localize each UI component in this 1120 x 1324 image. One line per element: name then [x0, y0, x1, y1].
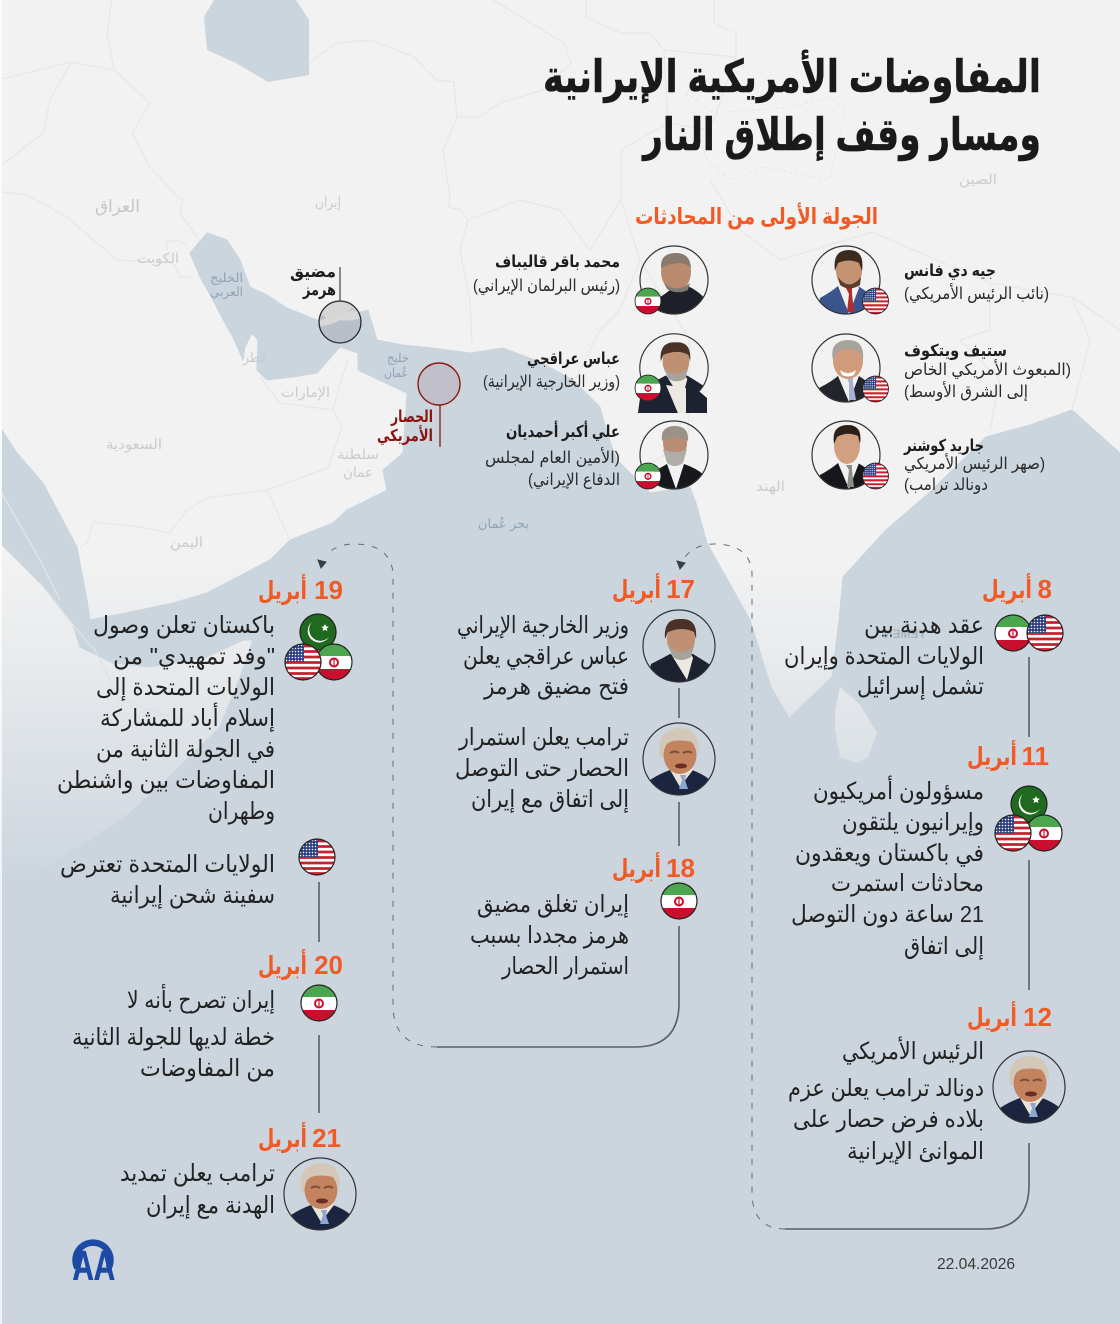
panel: april 19: في الجولة الثانية من — [96, 736, 275, 763]
panel: april 20: إيران تصرح بأنه لا — [127, 984, 275, 1015]
map labels: الهند — [756, 478, 785, 495]
panel: april 11: محادثات استمرت — [831, 870, 984, 897]
callout: american blockade — [377, 363, 460, 447]
panel: april 20 — [72, 949, 343, 1113]
panel: april 21: ترامب يعلن تمديد — [120, 1160, 275, 1187]
panel: april 17: وزير الخارجية الإيراني — [457, 612, 629, 639]
person: witkoff: إلى الشرق الأوسط) — [904, 381, 1028, 402]
date: 22.04.2026 — [937, 1256, 1015, 1273]
panel: april 19: إسلام أباد للمشاركة — [100, 703, 275, 733]
panel: april 19: باكستان تعلن وصول — [93, 612, 275, 639]
map: sri lanka — [835, 687, 877, 763]
portrait: trump — [284, 1158, 356, 1234]
panel: april 17: الحصار حتى التوصل — [455, 755, 629, 782]
panel: april 20: 20 — [314, 950, 343, 980]
panel: iran delegation — [473, 246, 708, 493]
portrait: trump — [993, 1051, 1065, 1127]
map labels: سلطنة — [337, 446, 379, 462]
map labels: الإمارات — [281, 384, 330, 401]
panel: april 12: الموانئ الإيرانية — [847, 1138, 984, 1165]
person: ahmadian: الدفاع الإيراني) — [528, 471, 620, 490]
title — [543, 49, 1041, 161]
map: bottom fade — [0, 560, 1120, 880]
panel: april 12: أبريل — [967, 1001, 1017, 1033]
heading: first round of talks: الجولة الأولى من المحادثات — [635, 202, 878, 230]
panel: april 11: 11 — [1022, 741, 1049, 771]
panel: april 11: إلى اتفاق — [904, 933, 984, 961]
callout: american blockade: الحصار — [390, 408, 433, 426]
panel: april 8: أبريل — [982, 573, 1032, 605]
panel: april 11: أبريل — [967, 740, 1017, 772]
callout: strait of hormuz: مضيق — [290, 263, 336, 282]
panel: april 11: في باكستان ويعقدون — [795, 840, 984, 867]
panel: april 19: "وفد تمهيدي" من — [113, 643, 275, 670]
panel: april 17: ترامب يعلن استمرار — [458, 724, 629, 751]
person: ahmadian — [485, 421, 708, 493]
icon: flag us — [299, 839, 335, 875]
portrait: araghchi — [643, 610, 715, 686]
person: kushner: (صهر الرئيس الأمريكي — [904, 453, 1045, 474]
timeline connector: middle column to left — [318, 544, 679, 1047]
person: ahmadian: علي أكبر أحمديان — [506, 421, 620, 442]
timeline connector: right column to middle — [677, 544, 1029, 1229]
panel: april 12: 12 — [1023, 1002, 1052, 1032]
panel: april 12: الرئيس الأمريكي — [842, 1036, 984, 1065]
person: vance — [812, 246, 1049, 318]
person: ghalibaf — [473, 246, 708, 318]
person: ghalibaf: محمد باقر قاليباف — [495, 253, 620, 272]
map labels: الصين — [959, 171, 997, 188]
panel: april 18: استمرار الحصار — [501, 953, 629, 980]
map labels: YEMEN — [884, 627, 926, 641]
person: ghalibaf: (رئيس البرلمان الإيراني) — [473, 277, 620, 296]
panel: april 19: سفينة شحن إيرانية — [110, 882, 275, 910]
panel: april 20: أبريل — [258, 949, 307, 981]
person: araghchi: (وزير الخارجية الإيرانية) — [483, 373, 620, 392]
map: borders — [0, 0, 1120, 720]
icon: flags pakistan us iran — [995, 786, 1062, 852]
person: vance: (نائب الرئيس الأمريكي) — [904, 283, 1049, 304]
panel: april 19 — [57, 574, 352, 942]
person: araghchi — [483, 334, 708, 413]
panel: april 19: الولايات المتحدة إلى — [96, 674, 275, 702]
person: witkoff: ستيف ويتكوف — [904, 342, 1007, 361]
map labels: العراق — [95, 197, 140, 216]
panel: april 11 — [791, 740, 1062, 990]
panel: april 19: الولايات المتحدة تعترض — [60, 851, 275, 878]
icon: flag iran — [301, 985, 337, 1022]
panel: april 21 — [120, 1122, 356, 1234]
panel: us delegation — [812, 246, 1071, 495]
map labels: العربي — [210, 285, 243, 300]
icon: flags pakistan us iran — [285, 614, 352, 681]
panel: april 19: 19 — [314, 575, 343, 605]
callout: strait of hormuz — [290, 263, 361, 343]
panel: april 17: فتح مضيق هرمز — [483, 673, 629, 700]
panel: april 8 — [784, 573, 1063, 737]
panel: april 11: 21 ساعة دون التوصل — [791, 901, 984, 928]
panel: april 8: تشمل إسرائيل — [857, 673, 984, 701]
person: kushner: دونالد ترامب) — [904, 476, 988, 495]
panel: april 20: خطة لديها للجولة الثانية — [72, 1024, 275, 1051]
panel: april 8: عقد هدنة بين — [864, 612, 984, 639]
panel: april 18: أبريل — [612, 852, 661, 884]
panel: april 18 — [470, 852, 697, 980]
panel: april 19: المفاوضات بين واشنطن — [57, 767, 275, 794]
map labels: الكويت — [137, 250, 179, 267]
icon: flag iran — [661, 883, 697, 920]
panel: april 8: 8 — [1038, 574, 1052, 604]
panel: april 21: 21 — [312, 1123, 341, 1153]
map labels: عُمان — [384, 366, 408, 380]
callout: strait of hormuz: هرمز — [302, 281, 336, 300]
panel: april 12: دونالد ترامب يعلن عزم — [788, 1075, 984, 1102]
panel: april 17: 17 — [666, 574, 695, 604]
person: vance: جيه دي فانس — [904, 262, 996, 281]
panel: april 18: هرمز مجددا بسبب — [470, 922, 629, 949]
panel: april 18: إيران تغلق مضيق — [477, 891, 629, 919]
map labels: الخليج — [210, 271, 243, 285]
person: kushner: جاريد كوشنر — [903, 437, 984, 456]
map labels: إيران — [315, 194, 341, 211]
map labels: السعودية — [106, 436, 162, 453]
panel: april 12 — [788, 1001, 1065, 1165]
person: ahmadian: (الأمين العام لمجلس — [485, 447, 620, 467]
panel: april 17: أبريل — [612, 573, 661, 605]
logo: AA: AA — [72, 1242, 115, 1289]
panel: april 21: أبريل — [258, 1122, 307, 1154]
panel: april 17 — [455, 573, 715, 846]
map labels: اليمن — [170, 534, 203, 551]
panel: april 17: إلى اتفاق مع إيران — [471, 786, 629, 814]
panel: april 12: بلاده فرض حصار على — [793, 1106, 984, 1133]
callout: american blockade: الأمريكي — [377, 425, 433, 446]
panel: april 8: الولايات المتحدة وإيران — [784, 643, 984, 671]
portrait: trump — [643, 723, 715, 799]
panel: april 17: عباس عراقجي يعلن — [463, 643, 629, 670]
panel: april 19: أبريل — [258, 574, 307, 606]
person: witkoff: (المبعوث الأمريكي الخاص — [904, 359, 1071, 380]
panel: april 18: 18 — [666, 853, 695, 883]
person: witkoff — [812, 334, 1071, 406]
panel: april 11: وإيرانيون يلتقون — [842, 809, 984, 837]
panel: april 11: مسؤولون أمريكيون — [813, 776, 984, 805]
person: araghchi: عباس عراقجي — [527, 350, 620, 369]
panel: april 21: الهدنة مع إيران — [146, 1192, 275, 1220]
map labels: خليج — [387, 351, 409, 365]
map labels: عمان — [343, 464, 373, 480]
person: kushner — [812, 421, 1045, 495]
panel: april 20: من المفاوضات — [140, 1055, 275, 1082]
panel: april 19: وطهران — [208, 798, 275, 825]
map labels: بحر عُمان — [478, 516, 529, 532]
icon: flags iran and us — [995, 615, 1063, 652]
map labels — [95, 171, 997, 641]
map labels: قطر — [242, 349, 266, 366]
